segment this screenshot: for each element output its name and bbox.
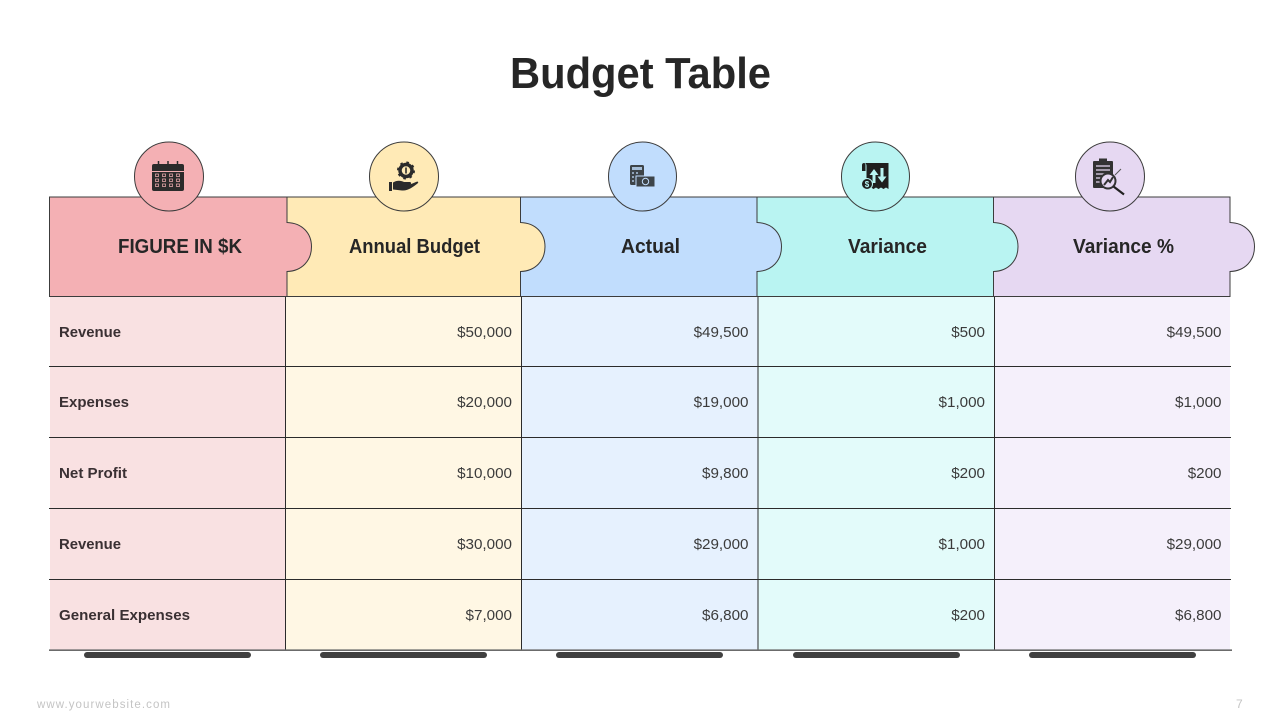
row: Revenue 2 xyxy=(59,536,1222,553)
row: Revenue: Revenue xyxy=(59,324,121,341)
row: Expenses: $19,000 xyxy=(694,394,748,411)
row: Net Profit: $10,000 xyxy=(457,465,512,482)
footer: website: www.yourwebsite.com xyxy=(36,699,170,711)
header: Figure puzzle piece xyxy=(50,197,312,296)
icon: hand with gear xyxy=(370,142,438,211)
row: Revenue xyxy=(59,324,1222,341)
icon: calculator and cash xyxy=(608,142,676,211)
column shadow bars xyxy=(84,652,1196,658)
row: Revenue: $500 xyxy=(951,324,985,341)
column fill: actual xyxy=(522,297,758,650)
budget table body xyxy=(49,297,1232,650)
row: Revenue 2: $1,000 xyxy=(939,536,985,553)
header: Actual puzzle piece xyxy=(520,197,782,296)
row: Revenue 2: $29,000 xyxy=(694,536,748,553)
row: Revenue 2: $30,000 xyxy=(457,536,512,553)
icon: receipt with arrows xyxy=(842,142,910,211)
heading: Actual: Actual xyxy=(621,236,680,258)
row: General Expenses xyxy=(59,607,1222,624)
row: Expenses: $1,000 xyxy=(939,394,985,411)
column fill: variance xyxy=(758,297,995,650)
column fill: figure labels xyxy=(50,297,286,650)
row: General Expenses: $7,000 xyxy=(466,607,512,624)
row: Net Profit: $200 xyxy=(951,465,985,482)
row: Net Profit xyxy=(59,465,1222,482)
header: Variance % puzzle piece xyxy=(994,197,1254,296)
header: Variance puzzle piece xyxy=(757,197,1018,296)
row: Revenue 2: Revenue xyxy=(59,536,121,553)
row: Expenses: $1,000 xyxy=(1175,394,1222,411)
row: General Expenses: General Expenses xyxy=(59,607,190,624)
row: Expenses xyxy=(59,394,1222,411)
row: Expenses: $20,000 xyxy=(457,394,512,411)
heading: Annual Budget: Annual Budget xyxy=(349,236,480,258)
row: Revenue: $50,000 xyxy=(457,324,512,341)
row: General Expenses: $6,800 xyxy=(702,607,748,624)
row: Revenue: $49,500 xyxy=(694,324,748,341)
footer: page number: 7 xyxy=(1236,697,1243,711)
icon: calendar xyxy=(134,142,204,211)
icon: receipt with arrows: $ xyxy=(865,180,870,189)
row: General Expenses: $6,800 xyxy=(1175,607,1222,624)
row: Revenue: $49,500 xyxy=(1167,324,1222,341)
icon: clipboard with magnifier xyxy=(1076,142,1144,211)
heading: Variance %: Variance % xyxy=(1073,236,1174,258)
row: Net Profit: $9,800 xyxy=(702,465,748,482)
row: Net Profit: $200 xyxy=(1188,465,1222,482)
heading: FIGURE IN $K: FIGURE IN $K xyxy=(118,236,243,258)
row: Revenue 2: $29,000 xyxy=(1167,536,1222,553)
heading: Variance: Variance xyxy=(848,236,927,258)
title: Budget Table xyxy=(510,49,771,98)
column fill: annual budget xyxy=(286,297,522,650)
row: Expenses: Expenses xyxy=(59,394,129,411)
header: Annual Budget puzzle piece xyxy=(287,197,545,296)
row: Net Profit: Net Profit xyxy=(59,465,127,482)
row: General Expenses: $200 xyxy=(951,607,985,624)
column fill: variance percent xyxy=(995,297,1230,650)
